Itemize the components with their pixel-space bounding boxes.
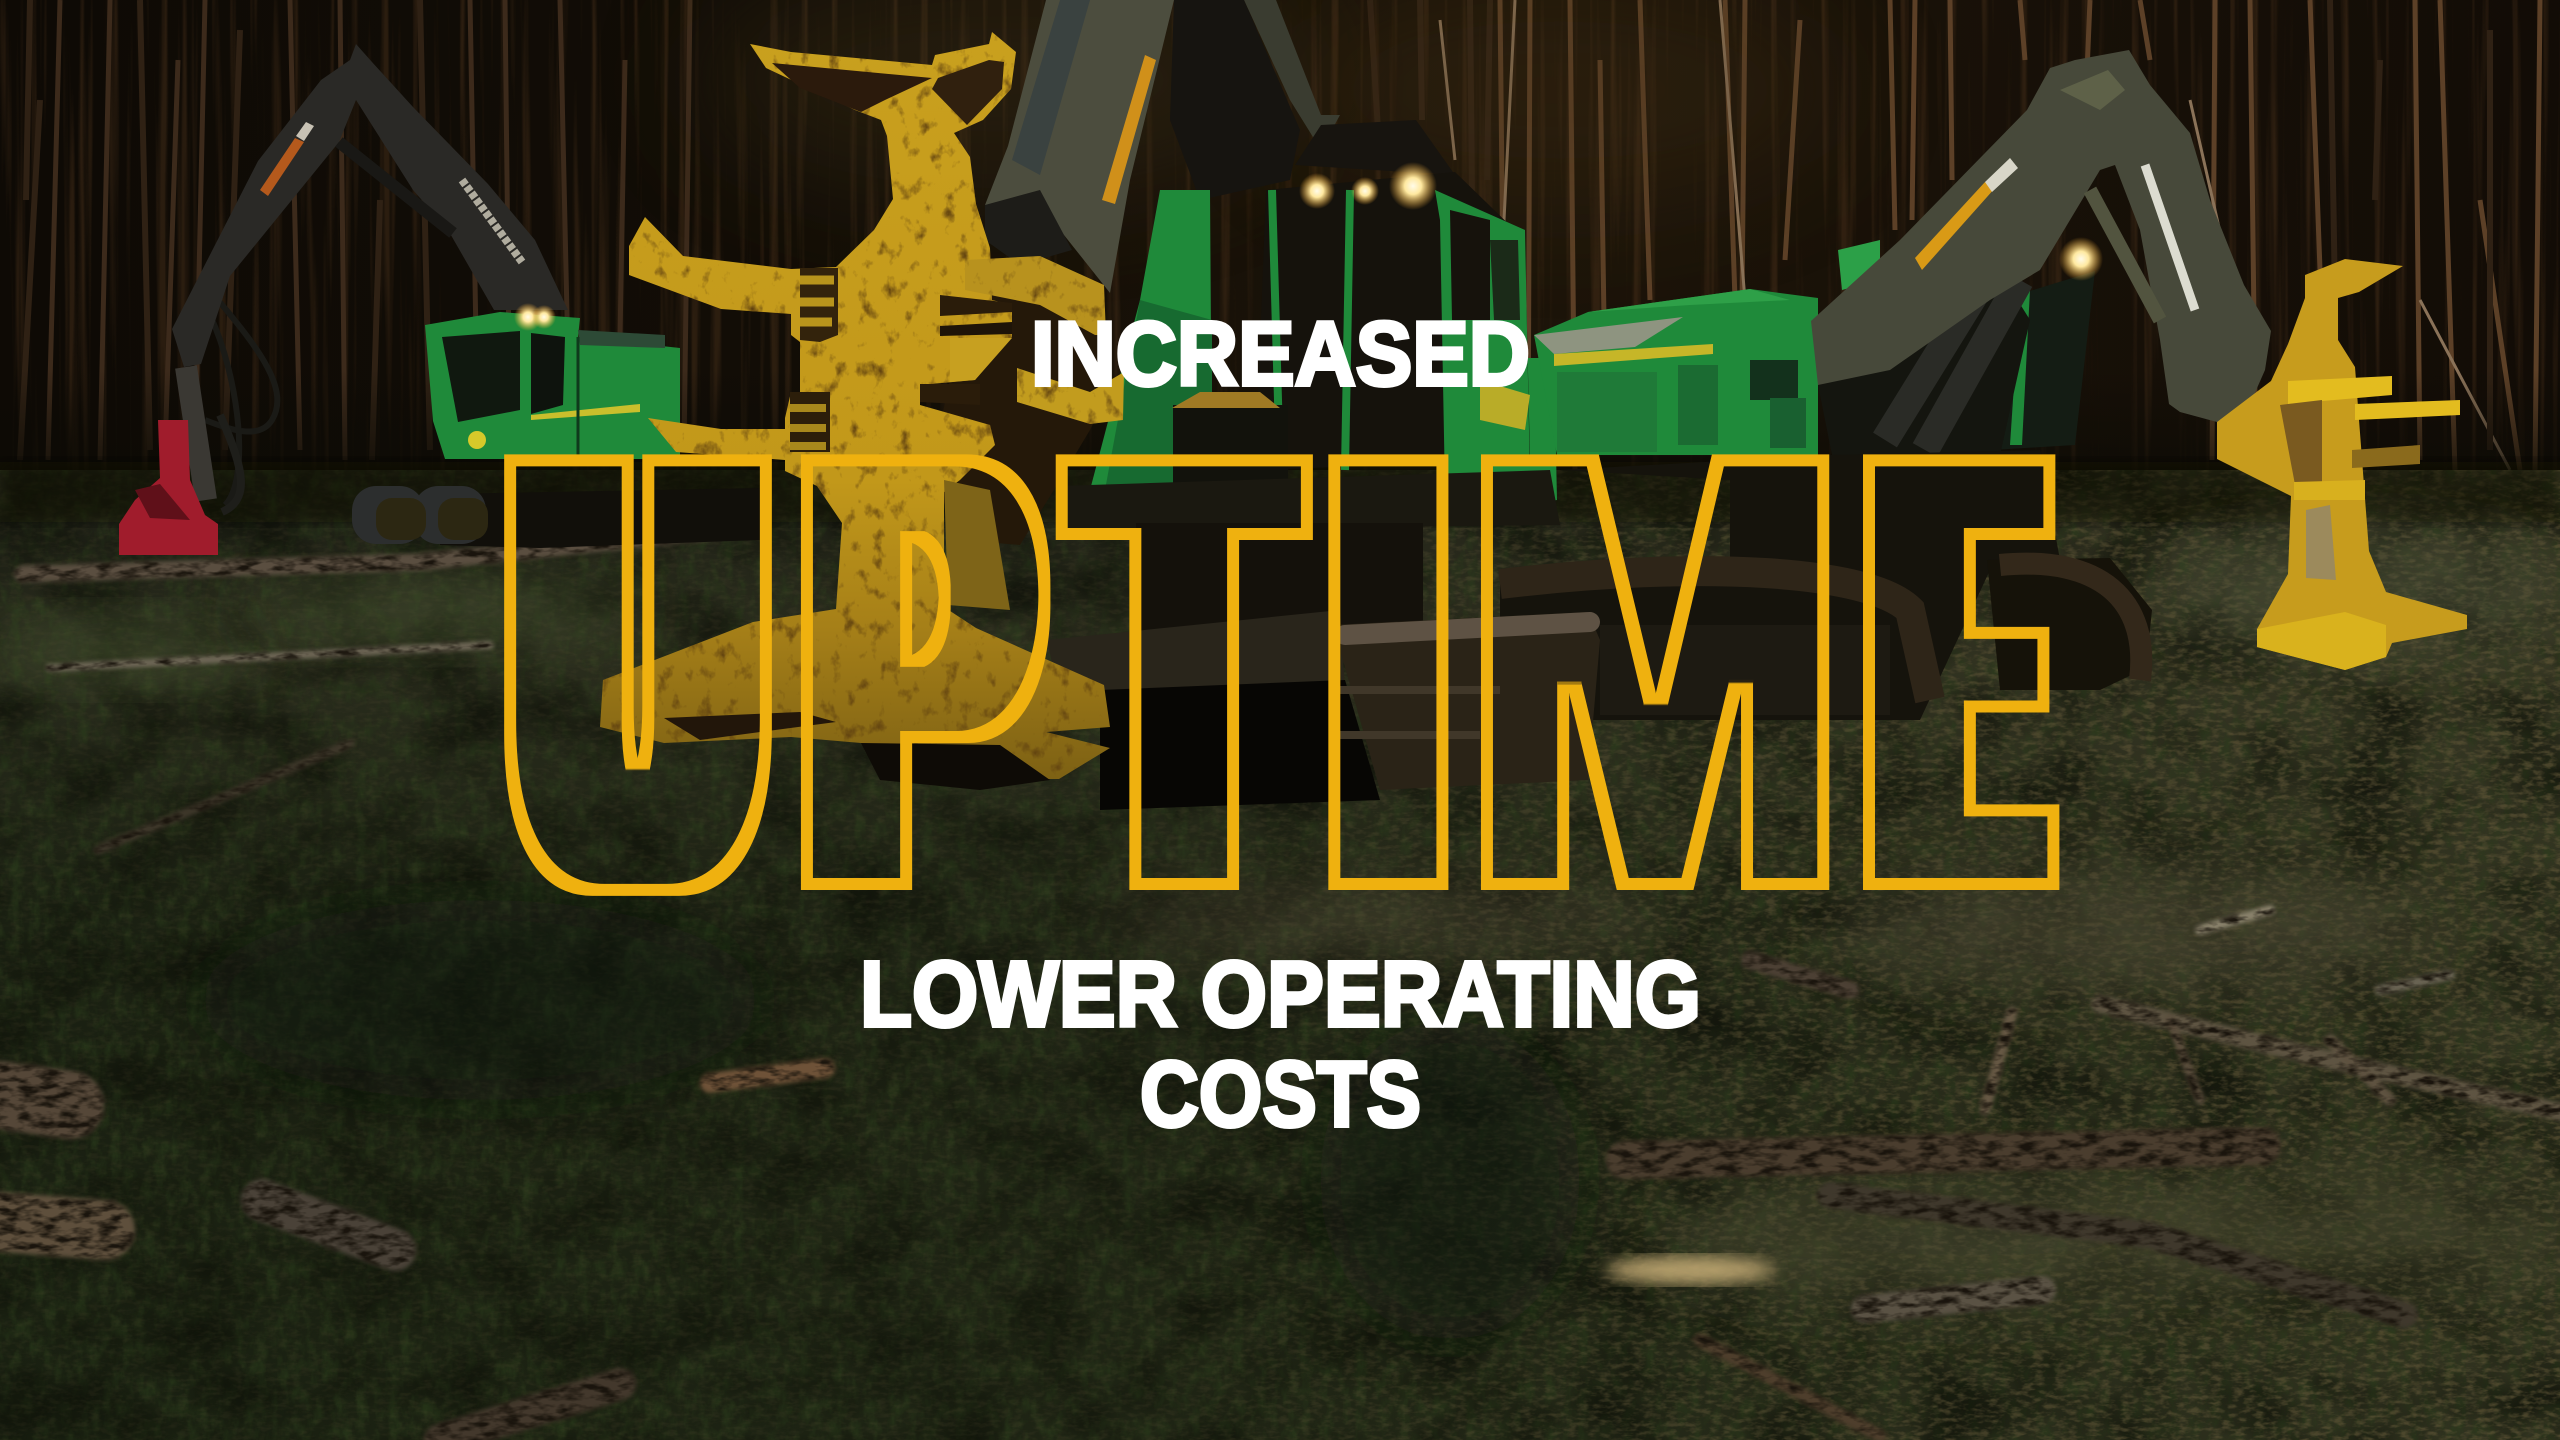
keep back label bbox=[462, 180, 522, 262]
cab bbox=[1295, 120, 1455, 175]
right slots bbox=[940, 295, 1012, 316]
subheading: lower operating costs: COSTS bbox=[1140, 1042, 1421, 1146]
right lower clamp arm bbox=[1017, 368, 1124, 424]
letter T: T bbox=[1083, 331, 1285, 1010]
subheading: lower operating costs bbox=[860, 942, 1701, 1146]
cab and engine bbox=[425, 312, 680, 459]
fallen logs bbox=[0, 528, 2560, 1440]
letter P: P bbox=[811, 332, 1030, 1010]
machine: left feller buncher bbox=[119, 44, 760, 555]
letter I: I bbox=[1342, 332, 1435, 1010]
boom bbox=[172, 44, 568, 367]
subheading: lower operating costs: LOWER OPERATING bbox=[860, 942, 1701, 1046]
yellow felling head: right bbox=[2217, 259, 2467, 670]
forest background bbox=[0, 0, 2560, 520]
undercarriage bbox=[1500, 450, 2060, 720]
left gears bbox=[800, 268, 838, 342]
letter E: E bbox=[1892, 332, 2025, 1010]
cup interiors bbox=[772, 63, 932, 112]
carriage and tracks bbox=[1059, 470, 1560, 530]
hydraulic hoses bbox=[205, 300, 277, 505]
right upper clamp arm bbox=[965, 256, 1106, 335]
letter U: U bbox=[529, 332, 747, 1010]
machine: right feller buncher bbox=[1500, 50, 2271, 720]
machine: centre feller buncher bbox=[985, 0, 1600, 810]
keep back label on stick bbox=[2145, 165, 2195, 310]
base shadows bbox=[664, 712, 836, 740]
ground with grass and debris bbox=[0, 462, 2560, 1440]
yellow felling head: centre bbox=[600, 32, 1124, 790]
letter M: M bbox=[1466, 331, 1845, 1010]
stick and boom bbox=[1244, 0, 1340, 150]
olive boom bbox=[1811, 50, 2271, 422]
title: UPTIME outlined lettering bbox=[529, 331, 2025, 1010]
heading: increased: INCREASED bbox=[1031, 304, 1530, 405]
stick and red head bbox=[186, 367, 206, 500]
